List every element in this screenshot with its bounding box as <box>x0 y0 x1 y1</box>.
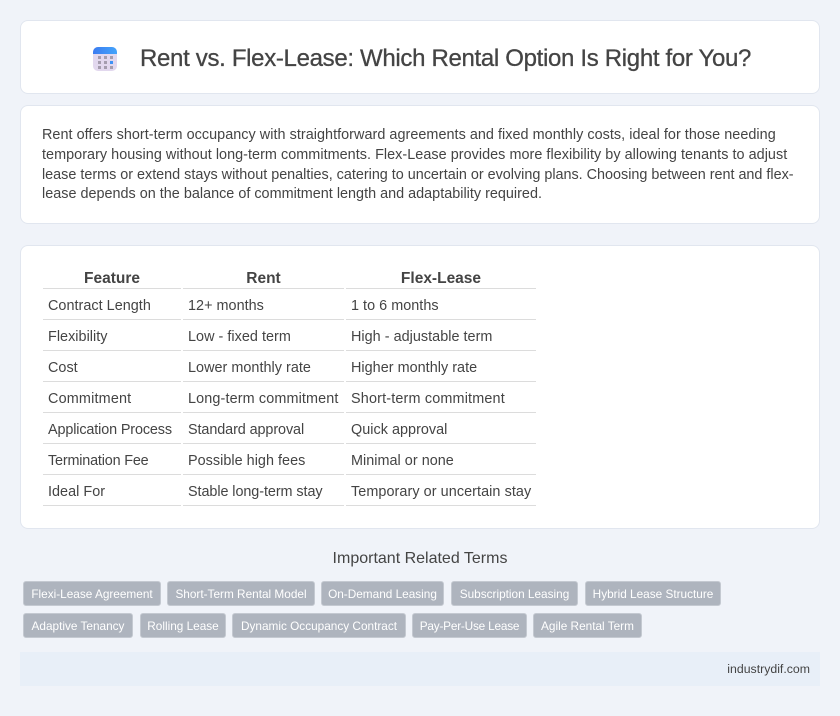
tag list: related terms: Flexi-Lease Agreement <box>31 587 153 601</box>
text block: introduction <box>42 127 794 202</box>
footer bar <box>20 652 820 686</box>
table: rent vs flex-lease: 1 to 6 months <box>351 298 439 314</box>
table: rent vs flex-lease: Commitment <box>48 391 131 407</box>
heading: related terms: Important Related Terms <box>333 550 507 567</box>
icon: calendar <box>93 47 117 71</box>
tag list: related terms: Subscription Leasing <box>460 587 569 601</box>
table: rent vs flex-lease: Termination Fee <box>48 453 148 469</box>
table: rent vs flex-lease: Quick approval <box>351 422 447 438</box>
tag list: related terms: Pay-Per-Use Lease <box>420 619 519 633</box>
footer source text: industrydif.com <box>727 662 810 676</box>
table: rent vs flex-lease: Ideal For <box>48 484 105 500</box>
table: rent vs flex-lease: Standard approval <box>188 422 304 438</box>
tag list: related terms: On-Demand Leasing <box>328 587 437 601</box>
text block: introduction: Rent offers short-term occupancy with straightforward agreements and fixed monthly costs, ideal for those needing <box>42 127 776 143</box>
tag list: related terms: Agile Rental Term <box>541 619 634 633</box>
panel: comparison table <box>20 245 820 529</box>
text block: introduction: lease depends on the balance of commitment length and adaptability required. <box>42 186 542 202</box>
panel: header <box>20 20 820 94</box>
table: rent vs flex-lease: Low - fixed term <box>188 329 291 345</box>
table: rent vs flex-lease: Possible high fees <box>188 453 305 469</box>
table: rent vs flex-lease: Feature <box>84 270 140 287</box>
text block: introduction: temporary housing without long-term commitments. Flex-Lease provides more flexibility by allowing tenants to adjust <box>42 147 787 163</box>
tag list: related terms: Short-Term Rental Model <box>175 587 307 601</box>
tag list: related terms: Dynamic Occupancy Contract <box>241 619 397 633</box>
tag list: related terms: Hybrid Lease Structure <box>593 587 713 601</box>
table: rent vs flex-lease: Cost <box>48 360 78 376</box>
table: rent vs flex-lease: Minimal or none <box>351 453 454 469</box>
tag list: related terms: Rolling Lease <box>147 619 219 633</box>
table: rent vs flex-lease: Lower monthly rate <box>188 360 311 376</box>
table: rent vs flex-lease: 12+ months <box>188 298 264 314</box>
table: rent vs flex-lease: Rent <box>246 270 281 287</box>
table: rent vs flex-lease: Higher monthly rate <box>351 360 477 376</box>
table: rent vs flex-lease: Temporary or uncertain stay <box>351 484 531 500</box>
tag list: related terms: Adaptive Tenancy <box>32 619 124 633</box>
table: rent vs flex-lease: High - adjustable term <box>351 329 492 345</box>
title: Rent vs. Flex-Lease: Which Rental Option Is Right for You? <box>140 45 751 72</box>
panel: introduction text <box>20 105 820 224</box>
table: rent vs flex-lease: Flexibility <box>48 329 108 345</box>
table: rent vs flex-lease: Flex-Lease <box>401 270 481 287</box>
tag list: related terms <box>23 581 721 638</box>
table: rent vs flex-lease <box>43 270 536 506</box>
table: rent vs flex-lease: Stable long-term stay <box>188 484 323 500</box>
table: rent vs flex-lease: Short-term commitment <box>351 391 505 407</box>
text block: introduction: lease terms or extend stays without penalties, catering to uncertain or evolving plans. Choosing between rent and flex- <box>42 167 794 183</box>
table: rent vs flex-lease: Long-term commitment <box>188 391 339 407</box>
table: rent vs flex-lease: Application Process <box>48 422 172 438</box>
table: rent vs flex-lease: Contract Length <box>48 298 151 314</box>
